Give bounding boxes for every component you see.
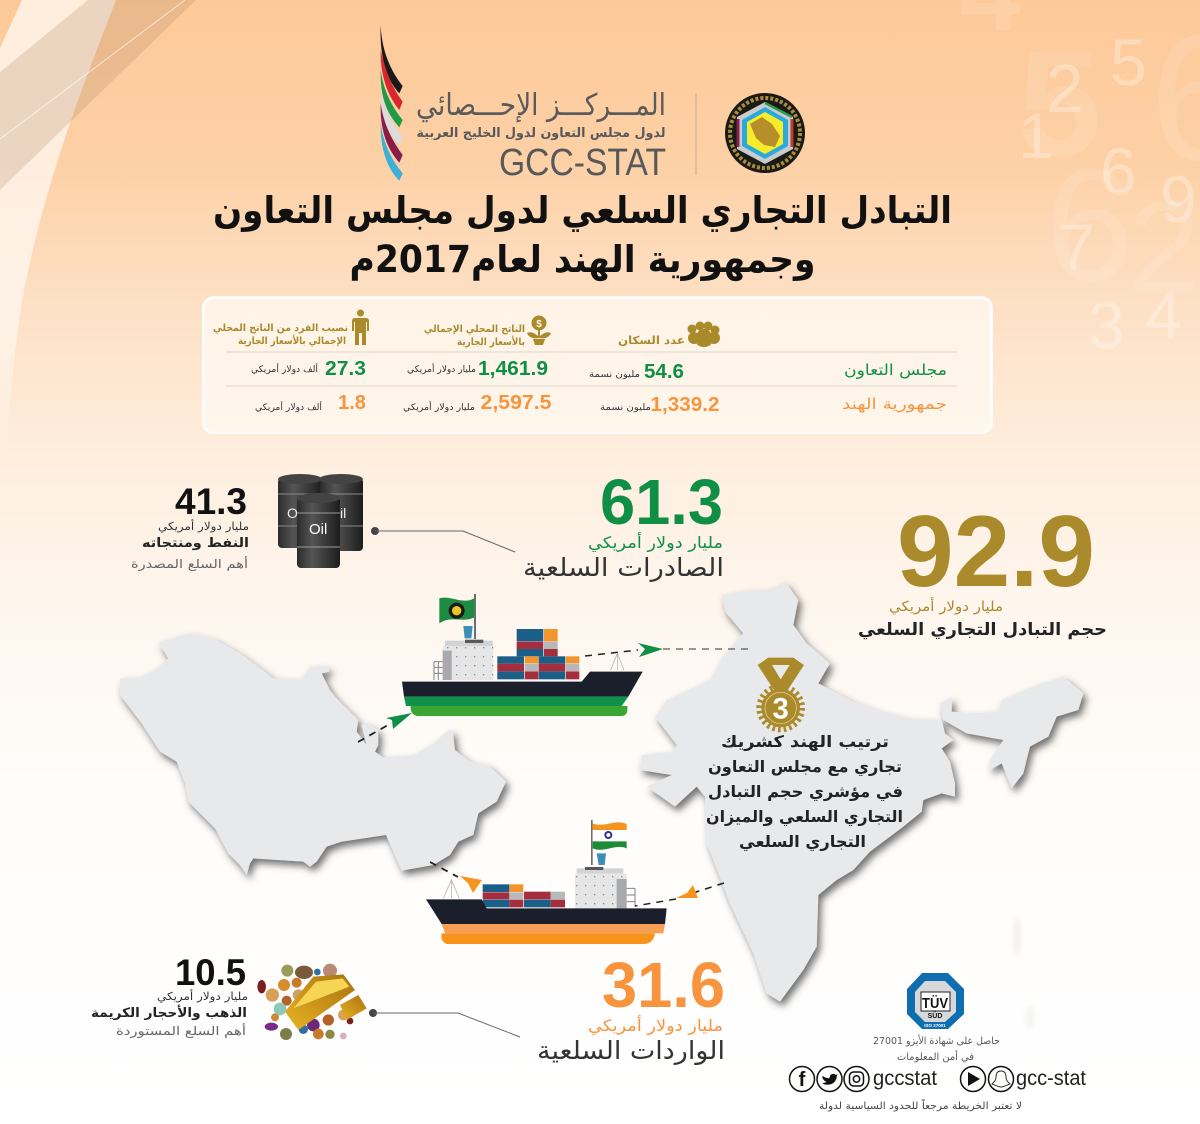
row: GCC: 27.3 xyxy=(325,358,366,380)
text: 9 xyxy=(1160,162,1197,236)
icon: facebook: f xyxy=(799,1069,806,1091)
column header: GDP: الناتج المحلي الإجمالي xyxy=(424,324,525,335)
text: gccstat handle: gccstat xyxy=(873,1067,937,1090)
row: GCC: ألف دولار أمريكي xyxy=(251,363,318,375)
column header: GDP xyxy=(424,316,551,348)
icon: medal rank 3: 3 xyxy=(773,692,789,725)
icon: youtube xyxy=(960,1066,986,1092)
icon: gold bars and gems xyxy=(257,964,367,1040)
stat: top export oil: 41.3 xyxy=(175,481,247,522)
arrow: from ship to GCC xyxy=(430,862,482,893)
row: India xyxy=(255,392,947,416)
icon: GCC flag xyxy=(439,594,476,639)
icon: facebook xyxy=(790,1066,814,1092)
icon: oil barrels: il xyxy=(340,505,346,521)
icon: twitter xyxy=(817,1066,842,1092)
stat: exports: الصادرات السلعية xyxy=(523,553,724,582)
ship: GCC export ship xyxy=(402,594,643,716)
row: GCC: 1,461.9 xyxy=(478,358,548,380)
text: India rank on map: ترتيب الهند كشريك xyxy=(721,732,889,751)
icon: instagram xyxy=(844,1066,869,1092)
icon: India flag xyxy=(591,820,627,865)
map: India xyxy=(640,582,1083,1002)
text: 5 xyxy=(1110,25,1147,99)
logo arabic name: المـــركـــز الإحـــصائي xyxy=(416,88,666,123)
icon: ribbon strands xyxy=(381,25,403,181)
leader line: exports xyxy=(371,527,515,552)
row: GCC: مليون نسمة xyxy=(589,370,640,380)
stat: exports xyxy=(523,466,724,582)
ship: India import ship xyxy=(426,820,667,944)
logo: GCC-STAT xyxy=(381,25,805,184)
stat: top export oil: النفط ومنتجاته xyxy=(142,536,249,551)
column header: GDP per capita xyxy=(213,310,369,347)
icon: oil barrels xyxy=(278,474,363,568)
text: 1 xyxy=(1018,100,1054,172)
map: GCC countries xyxy=(120,633,506,875)
stat: top import gold: أهم السلع المستوردة xyxy=(116,1023,246,1039)
text: map disclaimer: لا تعتبر الخريطة مرجعاً للحدود السياسية لدولة xyxy=(819,1098,1022,1112)
text: 6 xyxy=(1045,135,1134,314)
row: GCC: مجلس التعاون xyxy=(844,361,947,379)
row: India: مليون نسمة xyxy=(600,403,651,413)
row: India: مليار دولار أمريكي xyxy=(403,401,475,413)
stat: total trade volume: حجم التبادل التجاري السلعي xyxy=(858,620,1107,640)
title xyxy=(213,189,952,282)
row: India: ألف دولار أمريكي xyxy=(255,401,322,413)
icon: snapchat xyxy=(988,1066,1014,1092)
text: India rank on map xyxy=(706,732,903,852)
row: India: جمهورية الهند xyxy=(842,395,947,413)
icon: TUV badge: TÜV xyxy=(922,995,948,1012)
stat: imports: مليار دولار أمريكي xyxy=(588,1015,723,1036)
text: 2 xyxy=(1128,174,1200,320)
logo latin name: GCC-STAT xyxy=(499,142,666,184)
stat: imports: 31.6 xyxy=(602,949,725,1021)
text: 7 xyxy=(1058,210,1095,284)
icon: oil barrels: O xyxy=(287,505,298,521)
arrow: from India to ship xyxy=(635,883,724,906)
text: gcc-stat handle: gcc-stat xyxy=(1016,1067,1086,1090)
row: GCC xyxy=(251,358,947,383)
icon: money plant xyxy=(527,316,551,345)
text: India rank on map: تجاري مع مجلس التعاون xyxy=(708,757,902,777)
leader line: imports xyxy=(369,1009,520,1037)
text: India rank on map: في مؤشري حجم التبادل xyxy=(708,782,903,802)
icon: person xyxy=(352,310,369,345)
stat: top import gold: مليار دولار أمريكي xyxy=(157,989,248,1003)
row: GCC: مليار دولار أمريكي xyxy=(407,363,476,375)
stat: top export oil: مليار دولار أمريكي xyxy=(158,519,249,533)
stat: top import gold: الذهب والأحجار الكريمة xyxy=(91,1004,247,1021)
icon: GCC emblem xyxy=(725,93,805,173)
title: التبادل التجاري السلعي لدول مجلس التعاون xyxy=(213,189,952,232)
icon: TUV badge: ISO 27001 xyxy=(924,1023,946,1028)
stat: top import gold xyxy=(91,952,248,1039)
text: India rank on map: التجاري السلعي والميزان xyxy=(706,807,903,827)
row: GCC: 54.6 xyxy=(644,361,684,383)
arrow: from GCC to ship xyxy=(358,713,412,742)
column header: GDP: بالأسعار الجارية xyxy=(457,335,525,348)
text: India rank on map: التجاري السلعي xyxy=(739,832,866,852)
social handles xyxy=(790,1066,1086,1092)
icon: oil barrels: Oil xyxy=(309,521,327,538)
stat: total trade volume xyxy=(858,496,1107,640)
icon: TUV badge: SÜD xyxy=(928,1011,942,1020)
column header: population xyxy=(618,322,720,347)
text: ISO certification: حاصل على شهادة الأيزو 27001 xyxy=(873,1034,1000,1047)
icon: people xyxy=(688,322,720,347)
stat: top import gold: 10.5 xyxy=(175,952,246,993)
stat: total trade volume: 92.9 xyxy=(897,496,1095,608)
column header: GDP per capita: نصيب الفرد من الناتج المحلي xyxy=(213,323,348,334)
stat: exports: مليار دولار أمريكي xyxy=(588,532,723,553)
text: ISO certification xyxy=(873,1034,1000,1063)
stat: top export oil: أهم السلع المصدرة xyxy=(131,556,248,572)
text: 2 xyxy=(1046,51,1084,127)
icon: TUV badge xyxy=(907,973,964,1029)
title: وجمهورية الهند لعام2017م xyxy=(350,238,816,282)
column header: population: عدد السكان xyxy=(618,334,685,347)
icon: medal rank 3 xyxy=(758,658,804,730)
stat: exports: 61.3 xyxy=(600,466,723,538)
column header: GDP per capita: الإجمالي بالأسعار الجارية xyxy=(238,334,346,347)
text: 5 xyxy=(1018,19,1101,187)
column header: GDP: $ xyxy=(536,319,542,330)
stat: imports xyxy=(537,949,725,1065)
row: India: 1,339.2 xyxy=(650,394,720,416)
text: ISO certification: في أمن المعلومات xyxy=(897,1050,974,1063)
text: 4 xyxy=(1145,278,1182,352)
panel: comparison table xyxy=(204,298,992,432)
stat: top export oil xyxy=(131,481,249,572)
arrow: from ship to India xyxy=(585,643,748,657)
stat: total trade volume: مليار دولار أمريكي xyxy=(889,597,1003,615)
stat: imports: الواردات السلعية xyxy=(537,1036,725,1065)
text: 6 xyxy=(1100,134,1137,208)
row: India: 2,597.5 xyxy=(480,392,552,414)
logo arabic subtitle: لدول مجلس التعاون لدول الخليج العربية xyxy=(416,126,666,141)
row: India: 1.8 xyxy=(338,392,366,414)
text: 3 xyxy=(1088,288,1125,362)
